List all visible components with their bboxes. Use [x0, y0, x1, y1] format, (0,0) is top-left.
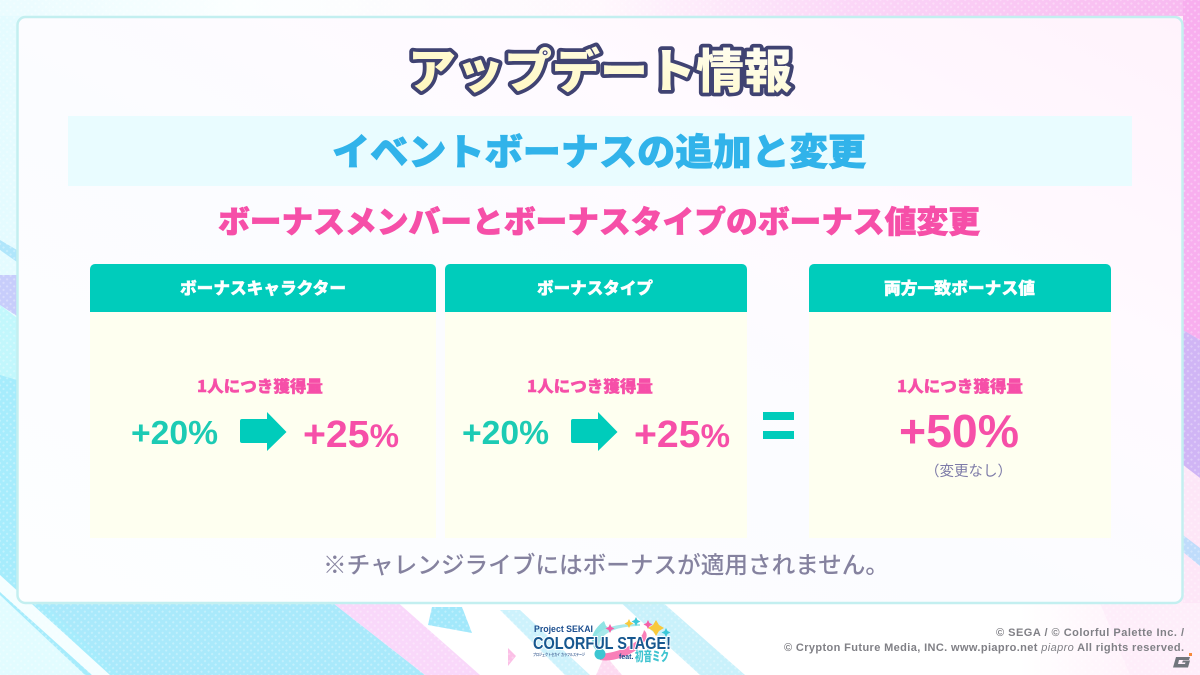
panel: bonus character: [90, 264, 436, 538]
header label: both match bonus: 両方一致ボーナス値: [884, 275, 1035, 299]
copyright text: © Crypton Future Media, INC. www.piapro.net piapro All rights reserved.: [784, 642, 1184, 654]
logo: Project SEKAI Colorful Stage: COLORFUL STAGE!: [533, 633, 671, 653]
logo: Project SEKAI Colorful Stage: [533, 617, 671, 665]
panel: both match bonus: [809, 264, 1111, 538]
header label: bonus character: ボーナスキャラクター: [180, 275, 346, 299]
section heading: ボーナスメンバーとボーナスタイプのボーナス値変更: [218, 197, 980, 242]
per-person label: 1人につき獲得量: [897, 373, 1023, 397]
logo: Project SEKAI Colorful Stage: feat.: [619, 654, 633, 661]
new value: +25%: [303, 414, 399, 456]
note: unchanged: （変更なし）: [925, 460, 1012, 481]
icon: arrow: [240, 412, 286, 451]
copyright text: [784, 627, 1184, 654]
header label: bonus type: ボーナスタイプ: [537, 275, 654, 299]
per-person label: 1人につき獲得量: [527, 373, 653, 397]
logo: Project SEKAI Colorful Stage: Project SEKAI: [534, 624, 593, 634]
icon: equals sign: [763, 412, 794, 439]
subtitle band: [68, 116, 1132, 186]
icon: watermark G: [1173, 653, 1192, 668]
title: アップデート情報: [408, 33, 792, 102]
icon: arrow: [571, 412, 618, 451]
per-person label: 1人につき獲得量: [197, 373, 323, 397]
old value: +20%: [131, 415, 218, 452]
footnote: ※チャレンジライブにはボーナスが適用されません。: [323, 546, 889, 580]
panel: bonus type: [445, 264, 747, 538]
old value: +20%: [462, 415, 549, 452]
logo: Project SEKAI Colorful Stage: 初音ミク: [635, 646, 669, 665]
copyright text: © SEGA / © Colorful Palette Inc. /: [996, 627, 1184, 639]
logo: Project SEKAI Colorful Stage: プロジェクトセカイ カラフルステージ: [533, 651, 585, 657]
value: +50%: [899, 405, 1019, 457]
subtitle band: イベントボーナスの追加と変更: [332, 122, 866, 176]
new value: +25%: [634, 414, 730, 456]
